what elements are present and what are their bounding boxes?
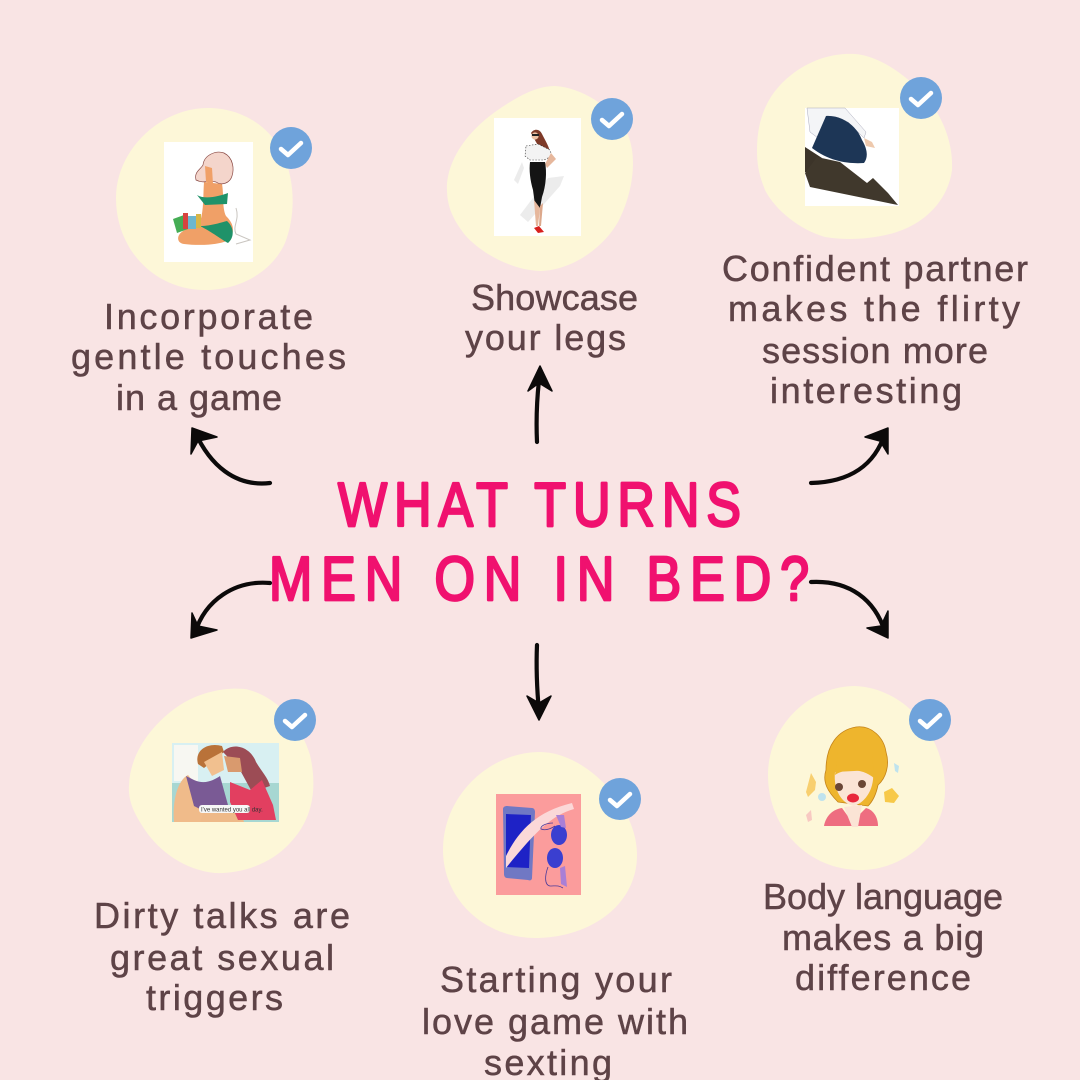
blob bbox=[129, 689, 313, 873]
label: Dirty talks are bbox=[94, 895, 350, 936]
check badge bbox=[591, 98, 633, 140]
label: difference bbox=[795, 957, 971, 998]
label: Confident partner bbox=[722, 248, 1028, 289]
label bbox=[722, 248, 1028, 411]
label: Showcase bbox=[471, 277, 638, 318]
panel: body language bbox=[763, 686, 1003, 998]
label: triggers bbox=[146, 977, 283, 1018]
illustration: blonde cartoon girl bbox=[806, 727, 899, 827]
blob bbox=[443, 752, 637, 938]
label: makes the flirty bbox=[728, 288, 1020, 329]
label: your legs bbox=[465, 317, 626, 358]
label: interesting bbox=[770, 370, 962, 411]
label: session more bbox=[762, 330, 988, 371]
panel: dirty talks bbox=[94, 689, 350, 1018]
panel: sexting bbox=[422, 752, 688, 1080]
blob bbox=[768, 686, 945, 870]
check badge bbox=[909, 699, 951, 741]
panel: showcase your legs bbox=[447, 86, 638, 358]
label: Incorporate bbox=[104, 296, 313, 337]
check badge bbox=[274, 699, 316, 741]
illustration: woman with gifts bbox=[164, 142, 253, 262]
label: love game with bbox=[422, 1001, 688, 1042]
arrow: to sexting bbox=[527, 645, 551, 720]
illustration: couple bbox=[172, 743, 279, 822]
check badge bbox=[900, 77, 942, 119]
blob bbox=[757, 54, 952, 239]
illustration: phone and bra bbox=[496, 794, 581, 895]
arrow: to showcase your legs bbox=[528, 366, 552, 442]
panel: confident partner bbox=[722, 54, 1028, 411]
illustration: couple: I've wanted you all day. bbox=[201, 808, 263, 814]
label bbox=[422, 959, 688, 1080]
label: Body language bbox=[763, 876, 1003, 917]
label: in a game bbox=[116, 377, 282, 418]
panel: gentle touches bbox=[71, 108, 346, 418]
label bbox=[71, 296, 346, 418]
blob bbox=[116, 108, 293, 290]
label: great sexual bbox=[110, 937, 334, 978]
check badge bbox=[599, 778, 641, 820]
title: MEN ON IN BED? bbox=[269, 545, 809, 614]
label bbox=[465, 277, 638, 358]
label: Starting your bbox=[440, 959, 672, 1000]
label: gentle touches bbox=[71, 336, 346, 377]
label: makes a big bbox=[782, 917, 984, 958]
illustration: seated legs in tights bbox=[805, 108, 899, 206]
title: WHAT TURNS bbox=[338, 471, 741, 540]
label bbox=[763, 876, 1003, 998]
arrow: to confident partner bbox=[811, 428, 888, 483]
arrow: to dirty talks bbox=[191, 583, 270, 638]
check badge bbox=[270, 127, 312, 169]
label bbox=[94, 895, 350, 1018]
blob bbox=[447, 86, 633, 271]
title bbox=[269, 471, 809, 614]
arrow: to gentle touches bbox=[191, 428, 270, 483]
arrow: to body language bbox=[811, 582, 888, 638]
illustration: woman in black skirt bbox=[494, 118, 581, 236]
